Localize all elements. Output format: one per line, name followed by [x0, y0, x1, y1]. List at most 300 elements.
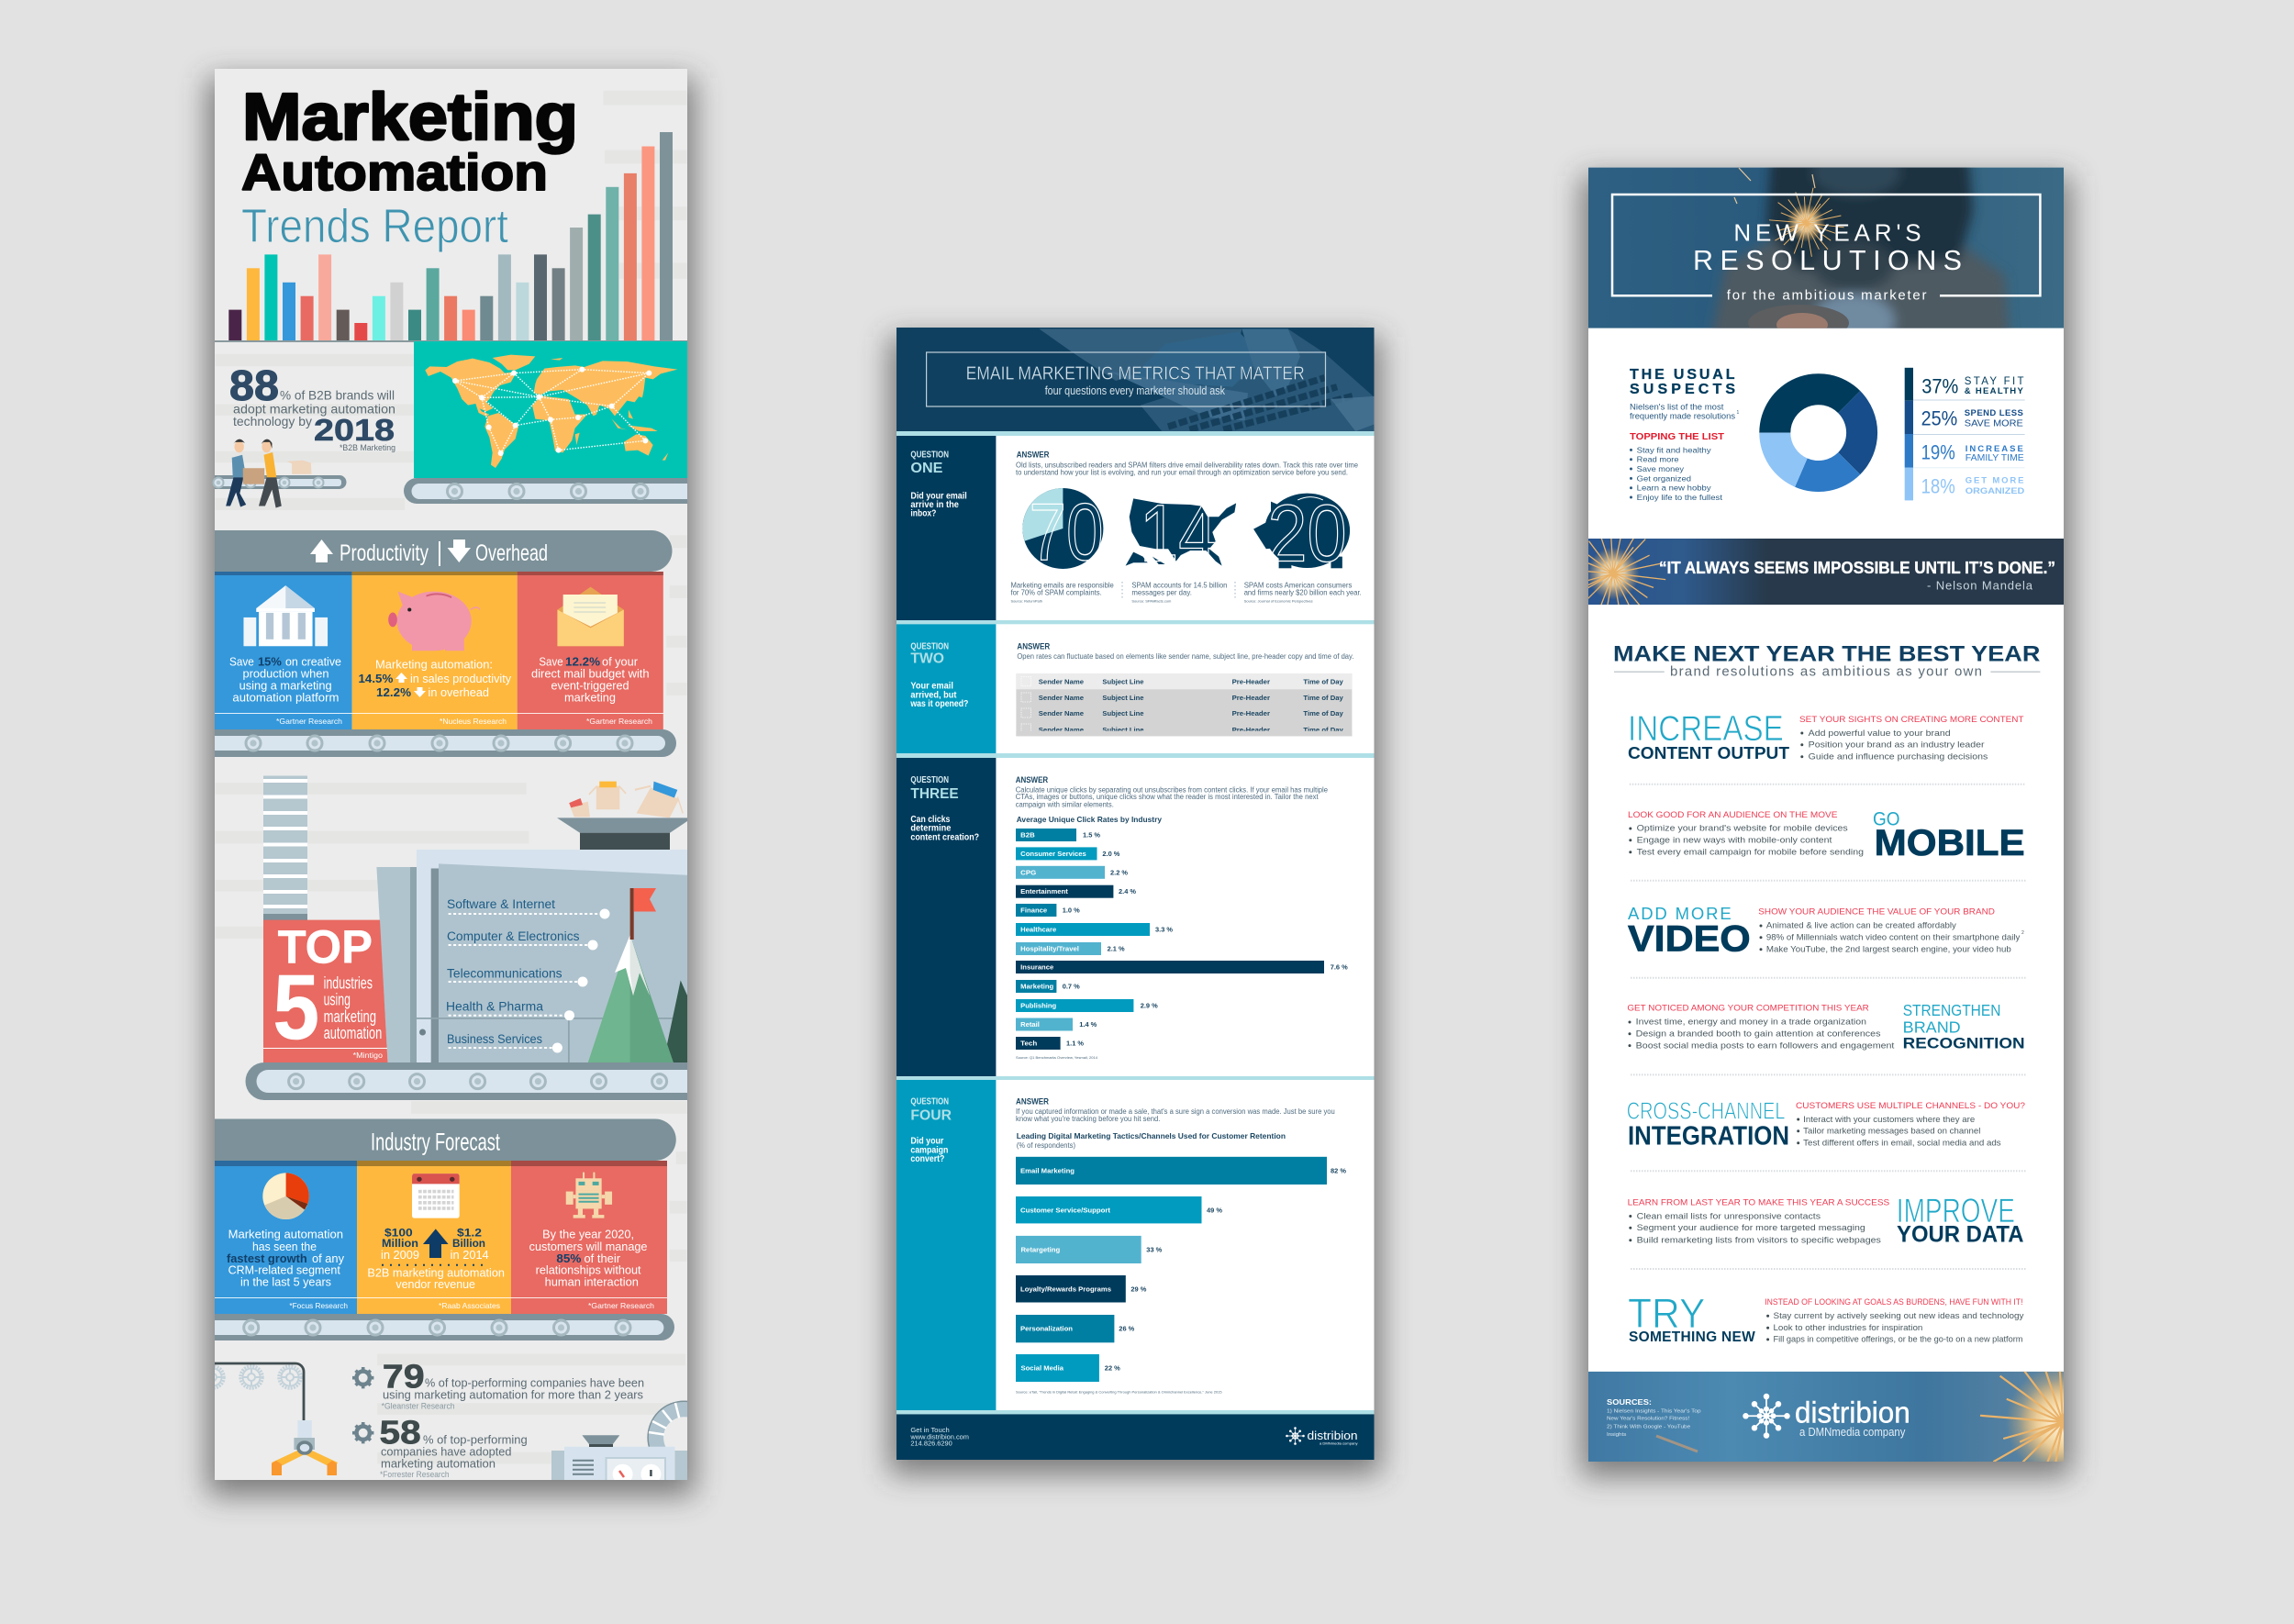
stat: 58 percent of top performers: 58 — [380, 1413, 421, 1451]
icon: piggy bank — [388, 592, 480, 651]
icon: pie with 70: 70 — [1030, 486, 1103, 577]
resolution: cross-channel integration — [1627, 1097, 2025, 1151]
bar chart: click rates by industry: B2B — [1020, 831, 1035, 839]
bar chart: retention channels: 82 % — [1331, 1166, 1346, 1174]
resolution: add more video: VIDEO — [1628, 918, 1751, 959]
icon: piggy with 20: 20 — [1268, 488, 1347, 579]
donut legend: STAY FIT — [1965, 376, 2024, 387]
question four: ANSWER — [1016, 1097, 1049, 1107]
list: top five industries: Software & Internet — [447, 897, 555, 911]
question four: If you captured information or made a sale, that's a sure sign a conversion was made. Just be sure you — [1016, 1107, 1335, 1116]
panel: save 12.2 percent direct mail: event-triggered — [551, 679, 629, 692]
top 5 industries label: using — [324, 991, 351, 1009]
bar chart: retention channels: 26 % — [1119, 1325, 1135, 1333]
factory machine with fan and dials — [551, 1400, 687, 1480]
the usual suspects text: Nielsen's list of the most — [1630, 402, 1724, 411]
conveyor under map — [404, 478, 687, 504]
quote band — [1563, 525, 2064, 620]
title: Trends Report — [241, 200, 508, 253]
panel: fastest growth: Marketing automation — [228, 1229, 343, 1241]
section heading: brand resolutions as ambitious as your own — [1670, 663, 1982, 679]
bar chart: click rates by industry: 1.4 % — [1079, 1020, 1097, 1029]
resolution: improve your data: YOUR DATA — [1897, 1222, 2024, 1248]
resolution: add more video: Animated & live action can be created affordably — [1766, 921, 1956, 931]
stat: 88 percent of B2B brands: technology by — [233, 414, 312, 428]
bar chart: click rates by industry: Publishing — [1020, 1002, 1057, 1009]
inbox table: Pre-Header — [1232, 709, 1270, 717]
resolution: go mobile: GO — [1873, 808, 1899, 829]
conveyor under machine — [246, 1062, 687, 1100]
bar chart: retention channels: Customer Service/Support — [1020, 1206, 1111, 1214]
bar chart: click rates by industry: Marketing — [1020, 982, 1054, 991]
footer: sources and logo: Insights — [1607, 1432, 1627, 1438]
panel: marketing automation productivity: Marketing automation: — [375, 659, 493, 672]
question two: Your email — [910, 682, 953, 692]
resolution: go mobile — [1628, 808, 2025, 863]
bar chart: click rates by industry: 2.9 % — [1141, 1002, 1158, 1009]
question two: QUESTION — [910, 641, 949, 651]
the usual suspects text: Read more — [1637, 455, 1679, 464]
footer: sources and logo: 2) Think With Google - YouTube — [1607, 1424, 1690, 1429]
top 5 industries label: industries — [324, 974, 373, 993]
the usual suspects text: frequently made resolutions — [1630, 411, 1736, 420]
bar chart: retention channels: Personalization — [1020, 1325, 1073, 1333]
question four: Did your — [910, 1136, 943, 1146]
question four — [896, 1080, 1375, 1414]
resolution: add more video: Make YouTube, the 2nd largest search engine, your video hub — [1766, 945, 2011, 954]
resolution: cross-channel integration: Interact with your customers where they are — [1803, 1115, 1975, 1125]
the usual suspects text: 1 — [1736, 410, 1740, 416]
question two: Open rates can fluctuate based on elements like sender name, subject line, pre-header copy and time of day. — [1017, 652, 1353, 661]
panel: fastest growth: CRM-related segment — [228, 1263, 340, 1276]
heading bar: productivity and overhead: Overhead — [475, 540, 548, 566]
the usual suspects text: Get organized — [1637, 473, 1691, 483]
panel: save 15 percent: *Gartner Research — [276, 717, 342, 726]
donut legend: 19% — [1921, 441, 1955, 464]
question four: Leading Digital Marketing Tactics/Channels Used for Customer Retention — [1017, 1131, 1286, 1140]
header with laptop photo: EMAIL MARKETING METRICS THAT MATTER — [966, 363, 1305, 384]
inbox table: Subject Line — [1102, 694, 1143, 702]
title: Automation — [241, 143, 548, 201]
panel: save 15 percent: production when — [242, 668, 329, 681]
resolution: try something new — [1628, 1290, 2024, 1345]
question three: Calculate unique clicks by separating out unsubscribes from content clicks. If your email has multiple — [1016, 785, 1329, 794]
top 5 industries label: TOP — [278, 921, 373, 973]
footer: sources and logo: a DMNmedia company — [1799, 1425, 1906, 1439]
header with sparkler photo: NEW YEAR'S — [1733, 218, 1921, 246]
resolution: increase content output: Guide and influence purchasing decisions — [1809, 752, 1988, 762]
panel: email marketing metrics — [896, 328, 1376, 1460]
resolution: go mobile: Engage in new ways with mobile-only content — [1637, 835, 1832, 846]
resolution: cross-channel integration: Test different offers in email, social media and ads — [1803, 1138, 2001, 1149]
resolution: improve your data: Clean email lists for unresponsive contacts — [1637, 1211, 1821, 1221]
panel: save 12.2 percent direct mail: direct mail budget with — [531, 668, 650, 681]
bar chart: retention channels — [1016, 1157, 1346, 1382]
resolution: try something new: Stay current by actively seeking out new ideas and technology — [1773, 1311, 2024, 1321]
stat: 58 percent of top performers — [352, 1413, 528, 1479]
resolution: strengthen brand recognition: Boost social media posts to earn followers and engagement — [1636, 1040, 1895, 1051]
resolution: increase content output: Add powerful value to your brand — [1809, 729, 1951, 739]
panel: revenue growth: $100 — [384, 1229, 413, 1240]
heading bar: productivity and overhead: Productivity — [340, 540, 429, 566]
question two: was it opened? — [910, 699, 968, 709]
the usual suspects text: Save money — [1637, 464, 1685, 473]
heading bar: industry forecast — [215, 1119, 676, 1161]
resolution: strengthen brand recognition: STRENGTHEN — [1903, 1001, 2000, 1019]
bar chart: click rates by industry: Healthcare — [1020, 925, 1056, 934]
stat: 88 percent of B2B brands: 88 — [229, 362, 279, 409]
question three: Source: Q1 Benchmarks Overview, Yesmail, 2014 — [1016, 1055, 1098, 1060]
resolution: cross-channel integration: Tailor marketing messages based on channel — [1803, 1127, 1980, 1137]
panel: save 15 percent: Save — [229, 656, 254, 669]
donut chart — [1759, 373, 1877, 492]
inbox table: Sender Name — [1039, 694, 1084, 702]
footer: sources and logo: distribion — [1795, 1396, 1910, 1429]
question four: QUESTION — [910, 1097, 949, 1107]
question two: ANSWER — [1017, 641, 1051, 651]
resolution: cross-channel integration: INTEGRATION — [1628, 1121, 1789, 1151]
resolution: go mobile: LOOK GOOD FOR AN AUDIENCE ON THE MOVE — [1628, 810, 1837, 820]
bar chart: click rates by industry: Entertainment — [1020, 887, 1068, 895]
bar chart: click rates by industry: 2.1 % — [1108, 945, 1125, 952]
question one: QUESTION — [910, 450, 949, 461]
top 5 industries label: marketing — [324, 1007, 376, 1026]
top 5 industries label: 5 — [273, 956, 319, 1059]
panel: revenue growth: $1.2 — [457, 1229, 482, 1240]
resolution: strengthen brand recognition: Invest time, energy and money in a trade organization — [1636, 1018, 1866, 1028]
question one: ANSWER — [1017, 450, 1050, 460]
title — [241, 81, 578, 253]
donut legend: SAVE MORE — [1965, 417, 2023, 428]
resolution: add more video: 2 — [2021, 930, 2024, 936]
machine chute stripes — [263, 776, 307, 920]
icon: clock — [262, 1173, 309, 1219]
panel: save 12.2 percent direct mail — [518, 572, 663, 729]
the usual suspects text — [1630, 367, 1740, 502]
list: top five industries: Telecommunications — [447, 966, 562, 980]
inbox table: Sender Name — [1039, 726, 1084, 734]
panel: fastest growth: *Focus Research — [289, 1301, 348, 1310]
panel: fastest growth: of any — [312, 1252, 345, 1265]
bar chart: click rates by industry: CPG — [1020, 868, 1036, 876]
footer: contact and logo: Get in Touch — [910, 1426, 950, 1434]
footer: contact and logo: 214.826.6290 — [910, 1440, 952, 1448]
inbox table: Pre-Header — [1232, 726, 1270, 734]
icon: bank — [243, 585, 328, 646]
inbox table: Time of Day — [1303, 694, 1344, 702]
panel: save 15 percent: automation platform — [232, 692, 339, 705]
list: top five industries — [446, 897, 609, 1053]
heading bar: productivity and overhead — [215, 530, 673, 572]
the usual suspects text: Learn a new hobby — [1637, 484, 1711, 493]
stat: 79 percent of top performers: % of top-performing companies have been — [425, 1376, 644, 1390]
conveyor under productivity cards — [215, 729, 676, 757]
captions: Source: ReturnPath — [1011, 599, 1042, 604]
panel: marketing automation productivity: 14.5% — [358, 673, 393, 685]
resolution: go mobile: Test every email campaign for mobile before sending — [1637, 847, 1864, 857]
panel: revenue growth: Million — [382, 1239, 418, 1250]
icon: mountain with flag — [588, 888, 687, 1062]
resolution: strengthen brand recognition — [1627, 1001, 2025, 1051]
list: top five industries: Computer & Electronics — [447, 929, 580, 943]
resolution: cross-channel integration: CROSS-CHANNEL — [1627, 1097, 1786, 1125]
resolution: add more video: ADD MORE — [1628, 904, 1732, 923]
panel: save 15 percent: on creative — [285, 656, 341, 669]
resolution: increase content output: Position your brand as an industry leader — [1809, 740, 1984, 751]
footer: contact and logo — [896, 1414, 1375, 1460]
panel: revenue growth: in 2009 — [381, 1249, 419, 1262]
question four: convert? — [910, 1154, 944, 1164]
title: Marketing — [242, 81, 578, 154]
bar chart: click rates by industry: Retail — [1020, 1020, 1040, 1029]
the usual suspects text: Enjoy life to the fullest — [1637, 493, 1723, 502]
footer: sources and logo: SOURCES: — [1607, 1397, 1652, 1407]
the usual suspects text: SUSPECTS — [1630, 382, 1735, 397]
resolution: go mobile: Optimize your brand's website for mobile devices — [1637, 824, 1848, 834]
captions: Source: SPAMfacts.com — [1131, 599, 1172, 604]
panel: 85 percent without human interaction: *Gartner Research — [588, 1301, 654, 1310]
question one: to understand how your list is evolving, and run your email through an optimization service before you send. — [1016, 469, 1348, 477]
bar chart: retention channels: 33 % — [1146, 1246, 1163, 1254]
resolution: increase content output — [1628, 709, 2024, 762]
donut legend: INCREASE — [1965, 444, 2023, 454]
small conveyor with two people — [213, 439, 347, 508]
resolution: add more video — [1628, 904, 2024, 959]
donut legend: 18% — [1921, 474, 1955, 497]
panel: 85 percent without human interaction: relationships without — [536, 1263, 641, 1276]
question three: campaign with similar elements. — [1016, 801, 1114, 809]
hopper — [557, 818, 687, 850]
donut legend: & HEALTHY — [1965, 386, 2023, 396]
resolution: try something new: TRY — [1628, 1290, 1705, 1337]
stat: 88 percent of B2B brands — [229, 362, 395, 452]
question three: Average Unique Click Rates by Industry — [1017, 815, 1162, 824]
inbox table: Sender Name — [1039, 678, 1084, 686]
panel: marketing automation productivity: in sales productivity — [410, 673, 512, 685]
panel: marketing automation trends report — [202, 69, 720, 1485]
icon: envelope — [557, 587, 624, 646]
inbox table: Sender Name — [1039, 709, 1084, 717]
resolution: increase content output: SET YOUR SIGHTS ON CREATING MORE CONTENT — [1799, 715, 2024, 725]
question four: know what you're tracking before you hit send. — [1016, 1115, 1160, 1123]
question four: campaign — [910, 1145, 948, 1155]
panel: 85 percent without human interaction — [511, 1161, 667, 1314]
inbox table: Pre-Header — [1232, 694, 1270, 702]
panel: revenue growth — [357, 1161, 511, 1314]
bar chart: click rates by industry: Tech — [1020, 1039, 1038, 1048]
donut legend: GET MORE — [1965, 476, 2024, 486]
panel: save 12.2 percent direct mail: 12.2% — [565, 656, 600, 669]
header with sparkler photo: for the ambitious marketer — [1727, 288, 1927, 303]
panel: fastest growth — [215, 1161, 357, 1314]
panel: save 12.2 percent direct mail: of your — [602, 656, 638, 669]
stat: 79 percent of top performers: using marketing automation for more than 2 years — [383, 1387, 643, 1401]
donut legend: 25% — [1921, 407, 1957, 429]
inbox table: Subject Line — [1102, 709, 1143, 717]
question three: determine — [910, 824, 952, 834]
panel: save 12.2 percent direct mail: *Gartner Research — [586, 717, 652, 726]
bar chart: retention channels: Loyalty/Rewards Programs — [1020, 1285, 1111, 1294]
stat: 79 percent of top performers: 79 — [383, 1358, 425, 1396]
bar chart: click rates by industry: Insurance — [1020, 963, 1053, 971]
donut legend — [1905, 368, 2025, 500]
conveyor under forecast cards — [215, 1314, 674, 1340]
resolution: strengthen brand recognition: GET NOTICED AMONG YOUR COMPETITION THIS YEAR — [1627, 1004, 1869, 1014]
resolution: improve your data: IMPROVE — [1897, 1192, 2015, 1229]
panel: 85 percent without human interaction: 85% — [556, 1252, 581, 1265]
resolution: improve your data — [1628, 1192, 2024, 1248]
question three: QUESTION — [910, 775, 949, 785]
resolution: try something new: SOMETHING NEW — [1629, 1329, 1755, 1345]
top 5 industries label — [263, 920, 387, 1062]
list: top five industries: Health & Pharma — [446, 1000, 543, 1014]
footer: contact and logo: a DMNmedia company — [1320, 1442, 1358, 1446]
resolution: strengthen brand recognition: RECOGNITION — [1903, 1035, 2025, 1051]
resolution: try something new: Fill gaps in competitive offerings, or be the go-to on a new platform — [1773, 1335, 2023, 1345]
question one: arrive in the — [910, 500, 959, 510]
panel: marketing automation productivity: 12.2% — [376, 686, 411, 699]
resolution: increase content output: INCREASE — [1628, 709, 1784, 749]
resolution: improve your data: LEARN FROM LAST YEAR TO MAKE THIS YEAR A SUCCESS — [1628, 1197, 1889, 1207]
the usual suspects text: Stay fit and healthy — [1637, 445, 1711, 454]
resolution: strengthen brand recognition: BRAND — [1903, 1018, 1961, 1036]
question one — [896, 436, 1375, 624]
bar chart: click rates by industry: 1.5 % — [1083, 831, 1100, 839]
inbox table: Subject Line — [1102, 678, 1143, 686]
resolution: add more video: SHOW YOUR AUDIENCE THE VALUE OF YOUR BRAND — [1758, 907, 1995, 918]
inbox table: Time of Day — [1303, 709, 1344, 717]
resolution: cross-channel integration: CUSTOMERS USE MULTIPLE CHANNELS - DO YOU? — [1796, 1101, 2025, 1111]
boxes falling into hopper — [569, 782, 683, 818]
panel: save 15 percent: using a marketing — [239, 679, 332, 692]
stat: 79 percent of top performers — [352, 1358, 644, 1411]
bar chart: retention channels: Retargeting — [1020, 1246, 1061, 1254]
panel: save 12.2 percent direct mail: marketing — [564, 692, 616, 705]
header with sparkler photo — [1588, 149, 2064, 349]
bar chart: click rates by industry: Finance — [1020, 907, 1047, 914]
footer: contact and logo: distribion — [1307, 1429, 1358, 1442]
icon: calendar — [412, 1174, 460, 1218]
panel: revenue growth: B2B marketing automation — [367, 1266, 505, 1279]
inbox table: Pre-Header — [1232, 678, 1270, 686]
question one: ONE — [910, 461, 943, 476]
panel: save 15 percent — [215, 572, 352, 729]
stat: 58 percent of top performers: *Forrester Research — [380, 1470, 450, 1479]
panel: revenue growth: in 2014 — [451, 1249, 489, 1262]
stat: 88 percent of B2B brands: adopt marketing automation — [233, 402, 395, 417]
header with sparkler photo: RESOLUTIONS — [1693, 245, 1962, 276]
footer: sources and logo — [1588, 1343, 2149, 1498]
panel: fastest growth: has seen the — [252, 1240, 317, 1253]
stat: 58 percent of top performers: marketing automation — [381, 1456, 496, 1470]
panel: marketing automation productivity: *Nucleus Research — [440, 717, 507, 726]
resolution: strengthen brand recognition: Design a branded booth to gain attention at conferences — [1636, 1029, 1881, 1040]
the usual suspects text: TOPPING THE LIST — [1630, 431, 1725, 442]
question three: content creation? — [910, 833, 979, 842]
question two — [896, 624, 1375, 758]
resolution: increase content output: CONTENT OUTPUT — [1628, 743, 1790, 762]
question three: CTAs, images or buttons, unique clicks show what the reader is most interested in. Tailor the next — [1016, 793, 1319, 801]
resolution: try something new: Look to other industries for inspiration — [1773, 1323, 1922, 1333]
panel shadows — [207, 78, 2071, 1496]
captions: SPAM costs American consumers — [1244, 582, 1352, 590]
question one: Did your email — [910, 491, 967, 501]
captions: Marketing emails are responsible — [1011, 582, 1114, 590]
question one: Old lists, unsubscribed readers and SPAM filters drive email deliverability rates down. Track this rate over time — [1016, 462, 1359, 470]
bar chart: click rates by industry — [1016, 829, 1348, 1050]
panel: marketing automation productivity: in overhead — [428, 686, 489, 699]
bar chart: click rates by industry: 7.6 % — [1331, 963, 1348, 971]
quote band: - Nelson Mandela — [1927, 578, 2033, 592]
bar chart: click rates by industry: 2.0 % — [1102, 850, 1120, 858]
question three: ANSWER — [1016, 775, 1049, 784]
inbox table: Time of Day — [1303, 678, 1344, 686]
resolution: go mobile: MOBILE — [1875, 823, 2025, 863]
inbox table: Time of Day — [1303, 726, 1344, 734]
question four: Source: eTail, "Trends in Digital Retail: Engaging & Converting Through Personalization & Omnichannel Excellence," June 2015 — [1016, 1389, 1222, 1395]
list: top five industries: Business Services — [447, 1032, 542, 1046]
stat: 58 percent of top performers: companies have adopted — [381, 1445, 512, 1459]
icon: usa map with 14: 14 — [1140, 488, 1217, 579]
donut legend: FAMILY TIME — [1965, 452, 2024, 463]
panel: fastest growth: in the last 5 years — [240, 1276, 331, 1289]
quote band: “IT ALWAYS SEEMS IMPOSSIBLE UNTIL IT’S DONE.” — [1659, 559, 2055, 577]
top 5 industries label: *Mintigo — [353, 1051, 384, 1060]
donut legend: SPEND LESS — [1965, 408, 2023, 418]
stat: 88 percent of B2B brands: % of B2B brands will — [280, 388, 395, 403]
stat: 88 percent of B2B brands: *B2B Marketing — [340, 443, 395, 452]
bar chart: click rates by industry: 3.3 % — [1155, 925, 1173, 934]
stat: 88 percent of B2B brands: 2018 — [314, 413, 395, 447]
bar chart: click rates by industry: Hospitality/Travel — [1020, 945, 1079, 952]
panel: 85 percent without human interaction: customers will manage — [529, 1240, 648, 1253]
question three: THREE — [910, 786, 959, 802]
captions: SPAM accounts for 14.5 billion — [1131, 582, 1227, 590]
section heading: MAKE NEXT YEAR THE BEST YEAR — [1613, 641, 2041, 666]
bar chart: retention channels: 22 % — [1105, 1364, 1120, 1373]
panel: 85 percent without human interaction: human interaction — [545, 1276, 639, 1289]
question four: FOUR — [910, 1108, 952, 1123]
donut legend: ORGANIZED — [1965, 486, 2024, 496]
top 5 industries label: automation — [324, 1024, 382, 1042]
stat: 58 percent of top performers: % of top-performing — [423, 1432, 528, 1446]
bar chart: retention channels: Email Marketing — [1020, 1166, 1075, 1174]
robotic arm with gears — [202, 1363, 338, 1475]
bar chart: retention channels: 29 % — [1130, 1285, 1147, 1294]
bar chart: retention channels: 49 % — [1207, 1206, 1222, 1214]
bar chart decoration — [215, 132, 687, 342]
captions — [1011, 582, 1362, 604]
panel: 85 percent without human interaction: of their — [584, 1252, 620, 1265]
bar chart: click rates by industry: 1.1 % — [1066, 1039, 1084, 1048]
bar chart: click rates by industry: 2.4 % — [1119, 887, 1136, 895]
captions: messages per day. — [1131, 589, 1192, 597]
resolution: add more video: 98% of Millennials watch video content on their smartphone daily — [1766, 933, 2021, 943]
question three — [896, 758, 1375, 1080]
bar chart: retention channels: Social Media — [1020, 1364, 1064, 1373]
resolution: improve your data: Segment your audience for more targeted messaging — [1637, 1223, 1865, 1233]
donut legend: 37% — [1921, 374, 1958, 397]
question three: Can clicks — [910, 815, 951, 825]
panel: new year's resolutions — [1563, 149, 2149, 1498]
bar chart: click rates by industry: 2.2 % — [1110, 868, 1128, 876]
footer: contact and logo: www.distribion.com — [909, 1432, 969, 1440]
bar chart: click rates by industry: Consumer Services — [1020, 850, 1086, 858]
footer: sources and logo: 1) Nielsen Insights - This Year's Top — [1607, 1408, 1701, 1414]
inbox table — [1016, 673, 1352, 736]
stat: 79 percent of top performers: *Gleanster Research — [382, 1402, 455, 1411]
question two: TWO — [910, 651, 944, 667]
